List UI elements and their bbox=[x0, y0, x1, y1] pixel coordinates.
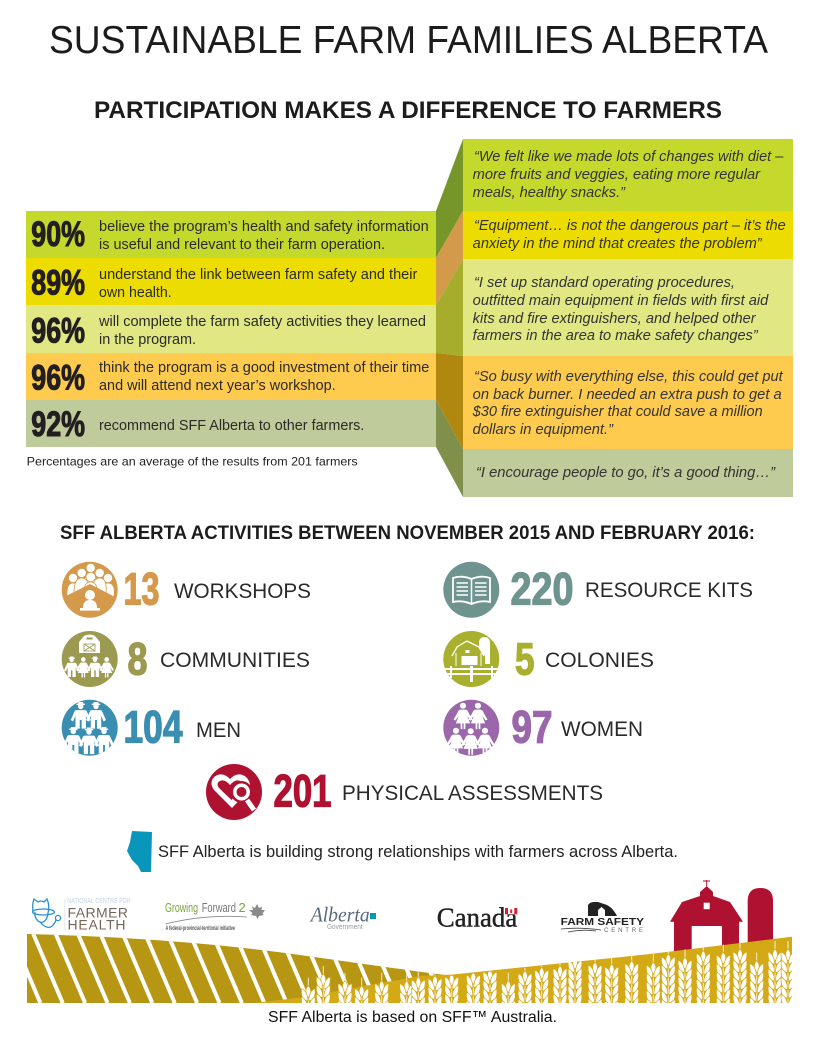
logo: National Centre for Farmer Health: HEALTH bbox=[68, 916, 126, 932]
quote: equipment: anxiety in the mind that creates the problem” bbox=[473, 236, 763, 252]
number: 13: 13 bbox=[124, 564, 160, 614]
row: 96 percent investment bbox=[26, 353, 436, 400]
number: 201: 201 bbox=[274, 766, 332, 816]
row: 96 percent investment: think the program is a good investment of their time bbox=[99, 360, 429, 376]
row: 90 percent: believe the program’s health and safety information bbox=[99, 219, 429, 235]
illustration: red barn and silo bbox=[670, 880, 773, 952]
label: workshops: WORKSHOPS bbox=[174, 579, 311, 603]
row: 90 percent: 90% bbox=[31, 215, 85, 254]
panel: farmer quotes bbox=[463, 139, 793, 497]
icon: Alberta map bbox=[127, 831, 152, 872]
quote: encourage bbox=[463, 449, 793, 497]
logo: Canada: Canada bbox=[437, 903, 517, 933]
stat: resource kits bbox=[443, 562, 753, 618]
quote: procedures: kits and fire extinguishers, and helped other bbox=[473, 311, 757, 327]
label: resource kits: RESOURCE KITS bbox=[585, 578, 753, 602]
logo: National Centre for Farmer Health bbox=[32, 898, 131, 932]
stat: physical assessments bbox=[206, 764, 603, 820]
quote: busy: dollars in equipment.” bbox=[473, 422, 614, 438]
row: 96 percent complete: in the program. bbox=[99, 332, 196, 348]
row: 96 percent complete: will complete the farm safety activities they learned bbox=[98, 314, 426, 330]
golden crop bbox=[253, 937, 792, 1003]
quote: busy: on back burner. I needed an extra push to get a bbox=[473, 387, 782, 403]
row: 89 percent: own health. bbox=[99, 285, 172, 301]
quote: diet: “We felt like we made lots of changes with diet – bbox=[474, 149, 784, 165]
icon: barn and fence bbox=[443, 631, 499, 687]
quote: diet: more fruits and veggies, eating more regular bbox=[473, 167, 761, 183]
row: 96 percent complete: 96% bbox=[31, 311, 85, 350]
quote: encourage: “I encourage people to go, it’s a good thing…” bbox=[476, 465, 776, 481]
row: 96 percent investment: 96% bbox=[31, 358, 85, 397]
logo: Farm Safety Centre: CENTRE bbox=[604, 928, 643, 934]
row: 92 percent bbox=[26, 400, 436, 447]
row: 92 percent: 92% bbox=[31, 405, 85, 444]
logo: National Centre for Farmer Health: FARMER bbox=[68, 904, 128, 920]
quote: equipment: “Equipment… is not the dangerous part – it’s the bbox=[474, 218, 786, 234]
ploughed field bbox=[11, 934, 453, 1003]
panel: survey results bbox=[26, 211, 436, 447]
logo: Growing Forward 2: Forward bbox=[202, 900, 236, 915]
label: physical assessments: PHYSICAL ASSESSMENTS bbox=[342, 781, 603, 805]
row: 96 percent investment: and will attend next year’s workshop. bbox=[99, 378, 336, 394]
logo: Alberta Government: Alberta bbox=[309, 902, 370, 926]
quote: equipment bbox=[463, 211, 793, 259]
label: women: WOMEN bbox=[561, 717, 643, 741]
quote: busy bbox=[463, 356, 793, 449]
icon: heart with magnifier bbox=[206, 764, 262, 820]
quote: diet: meals, healthy snacks.” bbox=[473, 185, 626, 201]
row: 89 percent: 89% bbox=[31, 263, 85, 302]
logo: Farm Safety Centre: FARM SAFETY bbox=[561, 917, 644, 928]
text: relationships: SFF Alberta is building strong relationships with farmers across Alberta. bbox=[158, 842, 678, 861]
quote: diet bbox=[463, 139, 793, 211]
logo: National Centre for Farmer Health: NATIONAL CENTRE FOR bbox=[67, 898, 131, 905]
label: communities: COMMUNITIES bbox=[160, 648, 310, 672]
logo: Alberta Government: Government bbox=[327, 922, 363, 931]
number: 97: 97 bbox=[512, 702, 552, 752]
stat: women bbox=[443, 700, 643, 756]
icon: men bbox=[62, 700, 118, 756]
wheat ears bbox=[301, 941, 792, 1003]
icon: barn and families bbox=[62, 631, 118, 687]
icon: women bbox=[443, 700, 499, 756]
logo: Growing Forward 2: Growing bbox=[165, 900, 198, 915]
heading: activities: SFF ALBERTA ACTIVITIES BETWEEN NOVEMBER 2015 AND FEBRUARY 2016: bbox=[60, 523, 755, 544]
quote: procedures: farmers in the area to make safety changes” bbox=[473, 328, 759, 344]
row: 90 percent bbox=[26, 211, 436, 258]
quote: busy: $30 fire extinguisher that could save a million bbox=[472, 404, 763, 420]
quote: procedures: “I set up standard operating procedures, bbox=[474, 275, 735, 291]
stat: men bbox=[62, 700, 241, 756]
label: colonies: COLONIES bbox=[545, 648, 654, 672]
logo: Farm Safety Centre bbox=[561, 902, 644, 934]
title: SUSTAINABLE FARM FAMILIES ALBERTA bbox=[49, 19, 768, 62]
row: 90 percent: is useful and relevant to their farm operation. bbox=[99, 237, 385, 253]
icon: workshop audience bbox=[62, 562, 118, 618]
quote: procedures bbox=[463, 259, 793, 356]
illustration: wheat field bbox=[27, 934, 792, 1003]
row: 96 percent complete bbox=[26, 305, 436, 353]
quote: busy: “So busy with everything else, this could get put bbox=[474, 369, 784, 385]
stat: communities bbox=[62, 631, 310, 687]
stat: workshops bbox=[62, 562, 311, 618]
footer note: SFF Alberta is based on SFF™ Australia. bbox=[268, 1009, 557, 1026]
footnote: Percentages are an average of the results from 201 farmers bbox=[27, 455, 358, 469]
row: 89 percent: understand the link between farm safety and their bbox=[99, 267, 417, 283]
number: 220: 220 bbox=[510, 564, 574, 614]
stat: colonies bbox=[443, 631, 654, 687]
row: 92 percent: recommend SFF Alberta to other farmers. bbox=[99, 418, 364, 434]
quote: procedures: outfitted main equipment in fields with first aid bbox=[473, 293, 769, 309]
connector folds bbox=[436, 139, 463, 497]
row: 89 percent bbox=[26, 258, 436, 305]
logo: Growing Forward 2: A federal-provincial-territorial initiative bbox=[166, 926, 235, 932]
logo: Growing Forward 2 bbox=[165, 900, 265, 932]
label: men: MEN bbox=[196, 718, 241, 742]
icon: open book bbox=[443, 562, 499, 618]
logo: Growing Forward 2: 2 bbox=[238, 900, 246, 915]
number: 8: 8 bbox=[128, 634, 148, 684]
number: 5: 5 bbox=[515, 634, 534, 684]
heading: participation: PARTICIPATION MAKES A DIFFERENCE TO FARMERS bbox=[94, 97, 722, 124]
number: 104: 104 bbox=[124, 702, 182, 752]
